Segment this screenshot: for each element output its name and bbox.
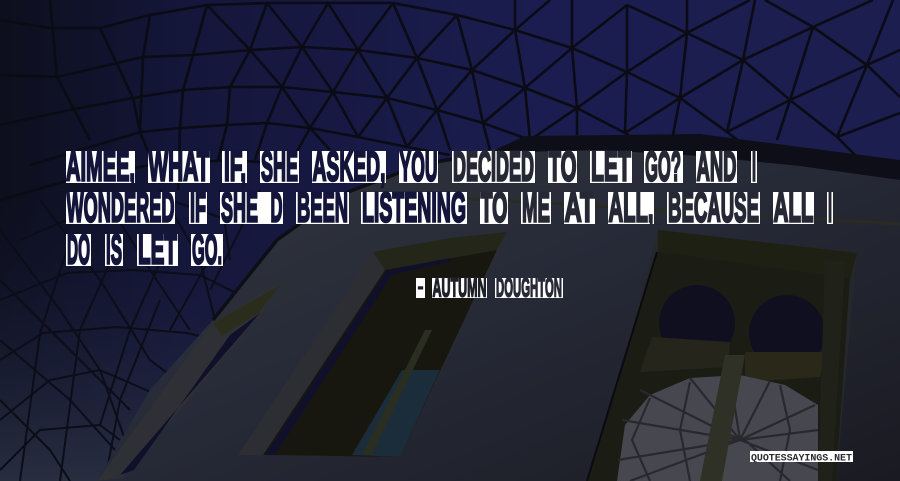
quote line 1: YOU bbox=[400, 142, 438, 190]
roof band bbox=[490, 134, 900, 180]
quote line 1: IF, bbox=[224, 142, 246, 190]
quote line 1: DECIDED bbox=[453, 142, 534, 190]
quote line 1: SHE bbox=[261, 142, 298, 190]
quote line 2: LISTENING bbox=[362, 184, 466, 230]
quote line 3 bbox=[66, 226, 223, 272]
central mullion bbox=[700, 355, 745, 481]
middle window bbox=[238, 232, 507, 457]
quote line 2: D bbox=[270, 184, 282, 230]
quote line 3: LET bbox=[138, 226, 177, 272]
quote line 2: ALL, bbox=[608, 184, 654, 230]
building wall bbox=[97, 143, 900, 481]
right window bbox=[590, 230, 857, 481]
window arches bbox=[659, 285, 735, 361]
left slit window bbox=[97, 283, 280, 481]
quote line 1: AND bbox=[696, 142, 736, 190]
quote line 1: GO? bbox=[645, 142, 681, 190]
quote line 1: LET bbox=[591, 142, 631, 190]
quote line 2: TO bbox=[480, 184, 508, 230]
attribution: - bbox=[417, 271, 424, 301]
dome lattice upper bbox=[0, 0, 900, 200]
quote line 2: SHE bbox=[221, 184, 258, 230]
quote text bbox=[66, 142, 833, 272]
quote line 2: BECAUSE bbox=[668, 184, 759, 230]
quote text: GO. bbox=[192, 226, 222, 272]
quote line 1: ASKED, bbox=[312, 142, 386, 190]
watermark: QUOTESSAYINGS.NET bbox=[751, 454, 852, 464]
dome lattice lower bbox=[0, 190, 260, 481]
quote line 2 bbox=[66, 184, 833, 230]
quote text: I bbox=[752, 142, 756, 190]
quote line 2: IF bbox=[190, 184, 206, 230]
quote line 3: IS bbox=[106, 226, 122, 272]
quote line 2: ME bbox=[522, 184, 550, 230]
quote line 1: AIMEE, bbox=[66, 142, 135, 190]
quote line 2: AT bbox=[564, 184, 595, 230]
quote line 2: BEEN bbox=[297, 184, 348, 230]
text: DOUGHTON bbox=[496, 272, 562, 302]
dome edge shadow bbox=[213, 152, 490, 320]
quote line 2: ALL bbox=[774, 184, 814, 230]
quote line 3: DO bbox=[67, 226, 90, 272]
text: I bbox=[828, 184, 832, 230]
quote line 2: ' bbox=[261, 184, 267, 230]
quote line 1: WHAT bbox=[148, 142, 210, 190]
quote line 2: WONDERED bbox=[66, 184, 174, 230]
quote line 1: TO bbox=[548, 142, 576, 190]
round window bbox=[617, 375, 818, 481]
quote line 1 bbox=[66, 142, 757, 190]
attribution: AUTUMN bbox=[432, 272, 486, 302]
